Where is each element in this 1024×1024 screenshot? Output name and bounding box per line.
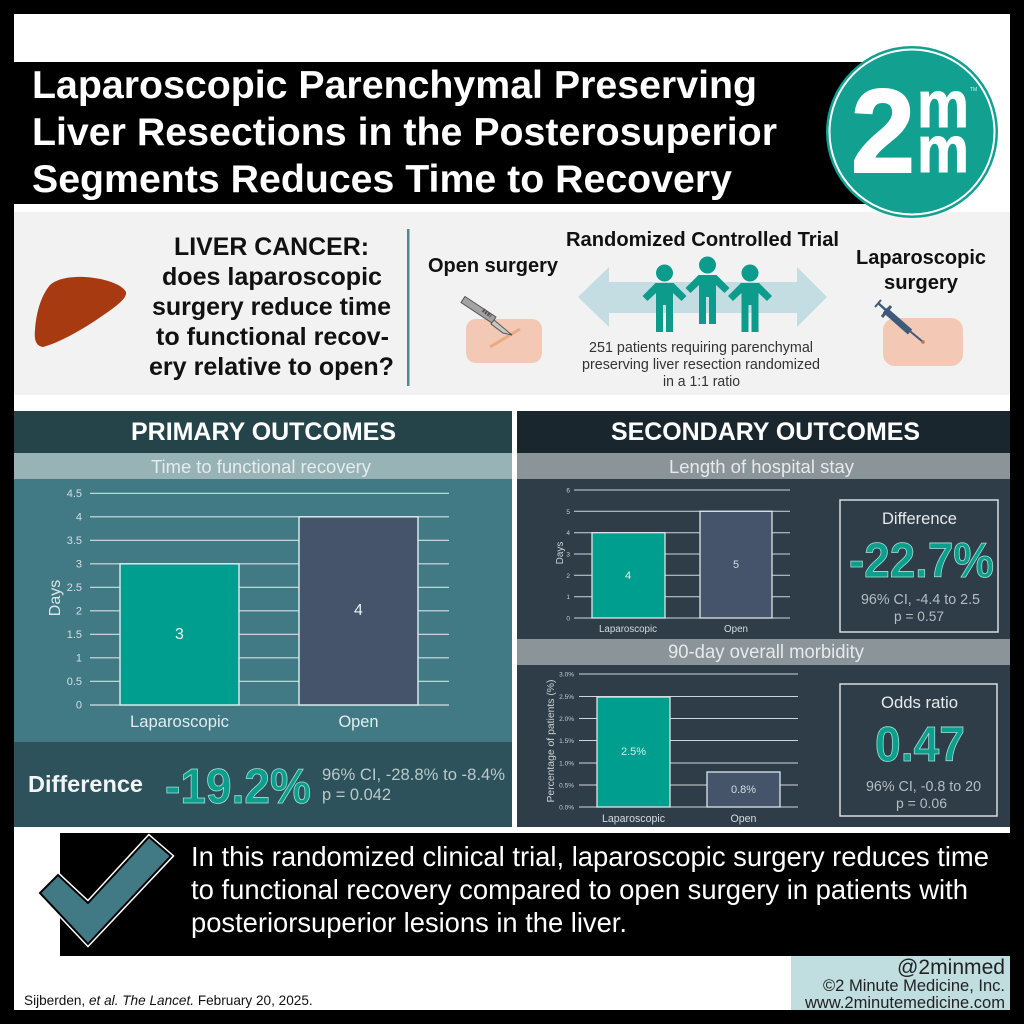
panel: secondary outcomes [517,411,1010,827]
bar chart: time to functional recovery: 4 [76,512,82,524]
panel: credits [791,956,1010,1012]
bar chart: time to functional recovery: 3 [76,558,82,570]
trial description [582,340,820,390]
callout: morbidity odds ratio: 96% CI, -0.8 to 20 [866,779,981,795]
icon: scalpel on skin [461,296,542,363]
callout: morbidity odds ratio: p = 0.06 [896,795,947,811]
bar chart: 90-day overall morbidity: 0.5% [559,782,574,790]
bar chart: 90-day overall morbidity: 2.5% [559,694,574,701]
bar chart: 90-day overall morbidity: 0.0% [559,804,574,812]
panel: study background [14,212,1010,395]
icon: liver [35,277,126,347]
bar chart: 90-day overall morbidity: Percentage of patients (%) [546,680,557,802]
bar chart: 90-day overall morbidity [546,672,798,825]
icon: patients [642,256,772,332]
question text: does laparoscopic [162,263,382,291]
panel: credits: ©2 Minute Medicine, Inc. [823,977,1005,995]
title banner [14,62,874,204]
bar chart: 90-day overall morbidity: 1.5% [559,738,574,745]
callout: morbidity odds ratio: 0.47 [875,718,965,772]
label: laparoscopic surgery: Laparoscopic [856,246,986,269]
icon: checkmark [40,837,171,944]
bar chart: 90-day overall morbidity: 0.8% [731,784,756,796]
trial description: 251 patients requiring parenchymal [589,340,813,356]
bar chart: length of hospital stay: 1 [566,594,570,601]
bar chart: 90-day overall morbidity: 2.0% [559,716,574,723]
bar chart: time to functional recovery: 4.5 [67,488,82,500]
result: primary difference [28,760,505,814]
question text: to functional recov- [156,323,389,351]
bar chart: time to functional recovery: 1.5 [67,629,82,641]
conclusion text: In this randomized clinical trial, laparoscopic surgery reduces time [191,841,989,872]
heading: primary outcomes: PRIMARY OUTCOMES [131,419,396,446]
bar chart: time to functional recovery: 2.5 [67,582,82,594]
callout: hospital stay difference: p = 0.57 [894,608,944,624]
bar chart: time to functional recovery: 2 [76,606,82,618]
heading: randomized controlled trial: Randomized Controlled Trial [566,229,839,251]
bar chart: time to functional recovery: Days [47,580,64,616]
label: open surgery: Open surgery [428,254,559,277]
bar chart: length of hospital stay: Laparoscopic [599,624,657,635]
bar chart: time to functional recovery: 3 [175,626,184,643]
label: laparoscopic surgery [856,246,986,294]
bar chart: length of hospital stay: 2 [566,573,570,580]
bar chart: time to functional recovery: 3.5 [67,535,82,547]
title banner: Liver Resections in the Posterosuperior [32,110,777,154]
panel: credits: www.2minutemedicine.com [804,994,1005,1012]
arrow: randomization double arrow [578,267,827,327]
bar chart: length of hospital stay: Open [724,624,748,635]
bar chart: time to functional recovery: 1 [76,652,82,664]
bar chart: 90-day overall morbidity: Laparoscopic [602,813,666,825]
bar chart: time to functional recovery [47,488,449,731]
bar chart: 90-day overall morbidity: 3.0% [559,672,574,678]
panel: primary outcomes [14,411,512,827]
label: laparoscopic surgery: surgery [884,271,959,294]
result: primary difference: 96% CI, -28.8% to -8.4% [322,765,505,784]
subheading: time to functional recovery: Time to functional recovery [151,456,372,477]
logo: 2 Minute Medicine [826,46,998,218]
bar chart: length of hospital stay: 5 [566,509,570,516]
result: primary difference: p = 0.042 [322,786,391,804]
bar chart: time to functional recovery: Laparoscopic [130,712,229,731]
callout: morbidity odds ratio: Odds ratio [881,693,958,712]
bar chart: length of hospital stay: 3 [566,552,570,558]
logo: 2 Minute Medicine: 2 [851,65,915,198]
conclusion text [191,841,989,938]
subheading: length of hospital stay: Length of hospital stay [669,456,855,477]
subheading: 90-day overall morbidity: 90-day overall morbidity [668,642,864,663]
bar chart: length of hospital stay: 4 [566,530,570,537]
result: primary difference: Difference [28,771,143,797]
conclusion text: to functional recovery compared to open surgery in patients with [191,874,968,905]
citation: Sijberden, et al. The Lancet. February 20, 2025. [24,993,313,1008]
panel: conclusion [40,833,1010,956]
callout: hospital stay difference: -22.7% [849,534,994,588]
question text: surgery reduce time [152,293,391,321]
callout: morbidity odds ratio [840,684,997,816]
bar chart: length of hospital stay [555,488,790,635]
callout: hospital stay difference: 96% CI, -4.4 to 2.5 [861,592,980,608]
logo: 2 Minute Medicine: TM [970,87,977,93]
result: primary difference: -19.2% [165,760,311,814]
bar chart: 90-day overall morbidity: 2.5% [621,746,646,758]
bar chart: length of hospital stay: Days [555,542,566,564]
title banner: Segments Reduces Time to Recovery [32,157,732,201]
trial description: in a 1:1 ratio [663,374,740,390]
callout: hospital stay difference [840,500,998,632]
panel: credits: @2minmed [897,956,1005,979]
bar chart: length of hospital stay: 6 [566,488,570,494]
logo: 2 Minute Medicine: m [917,112,969,186]
icon: syringe on skin [875,300,963,366]
bar chart: time to functional recovery: Open [338,713,379,731]
title banner: Laparoscopic Parenchymal Preserving [32,63,757,107]
bar chart: time to functional recovery: 0 [76,700,82,712]
trial description: preserving liver resection randomized [582,357,820,373]
bar chart: time to functional recovery: 4 [354,602,363,619]
bar chart: 90-day overall morbidity: 1.0% [559,760,574,768]
logo: 2 Minute Medicine: m [917,67,969,141]
callout: hospital stay difference: Difference [882,510,957,528]
question text: ery relative to open? [149,353,394,381]
bar chart: 90-day overall morbidity: Open [731,813,757,825]
bar chart: time to functional recovery: 0.5 [67,676,82,688]
question text [149,233,394,381]
question text: LIVER CANCER: [174,233,369,261]
conclusion text: posteriorsuperior lesions in the liver. [191,907,627,938]
heading: secondary outcomes: SECONDARY OUTCOMES [611,418,920,446]
bar chart: length of hospital stay: 0 [566,616,570,622]
bar chart: length of hospital stay: 5 [733,559,739,571]
bar chart: length of hospital stay: 4 [625,570,631,582]
